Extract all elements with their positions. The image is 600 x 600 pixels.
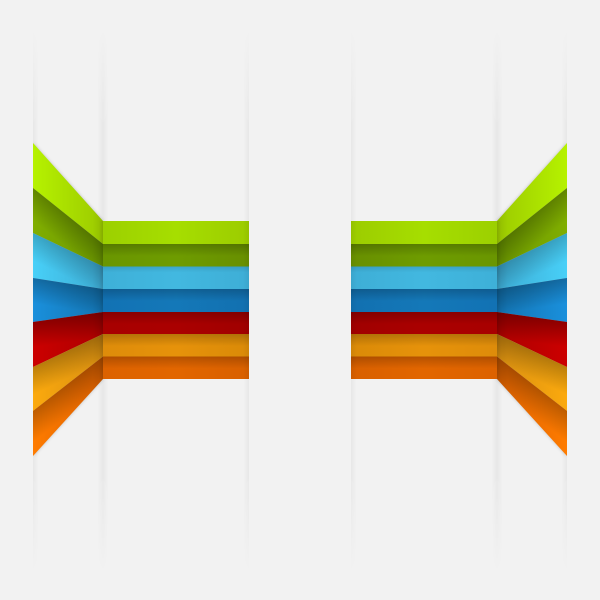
vertical fold shadows: [33, 112, 567, 490]
panel: left stripes: [33, 143, 249, 456]
right flat stripes: [351, 221, 497, 379]
left wing stripes: [33, 143, 103, 456]
right wing stripes: [497, 143, 567, 456]
soft shadow around right wing: [497, 143, 567, 456]
panel: right stripes: [351, 143, 567, 456]
infographic canvas: [33, 112, 567, 490]
outer margin strips covering blur: [0, 130, 600, 470]
soft shadow around left wing: [33, 143, 103, 456]
left flat stripes: [103, 221, 249, 379]
